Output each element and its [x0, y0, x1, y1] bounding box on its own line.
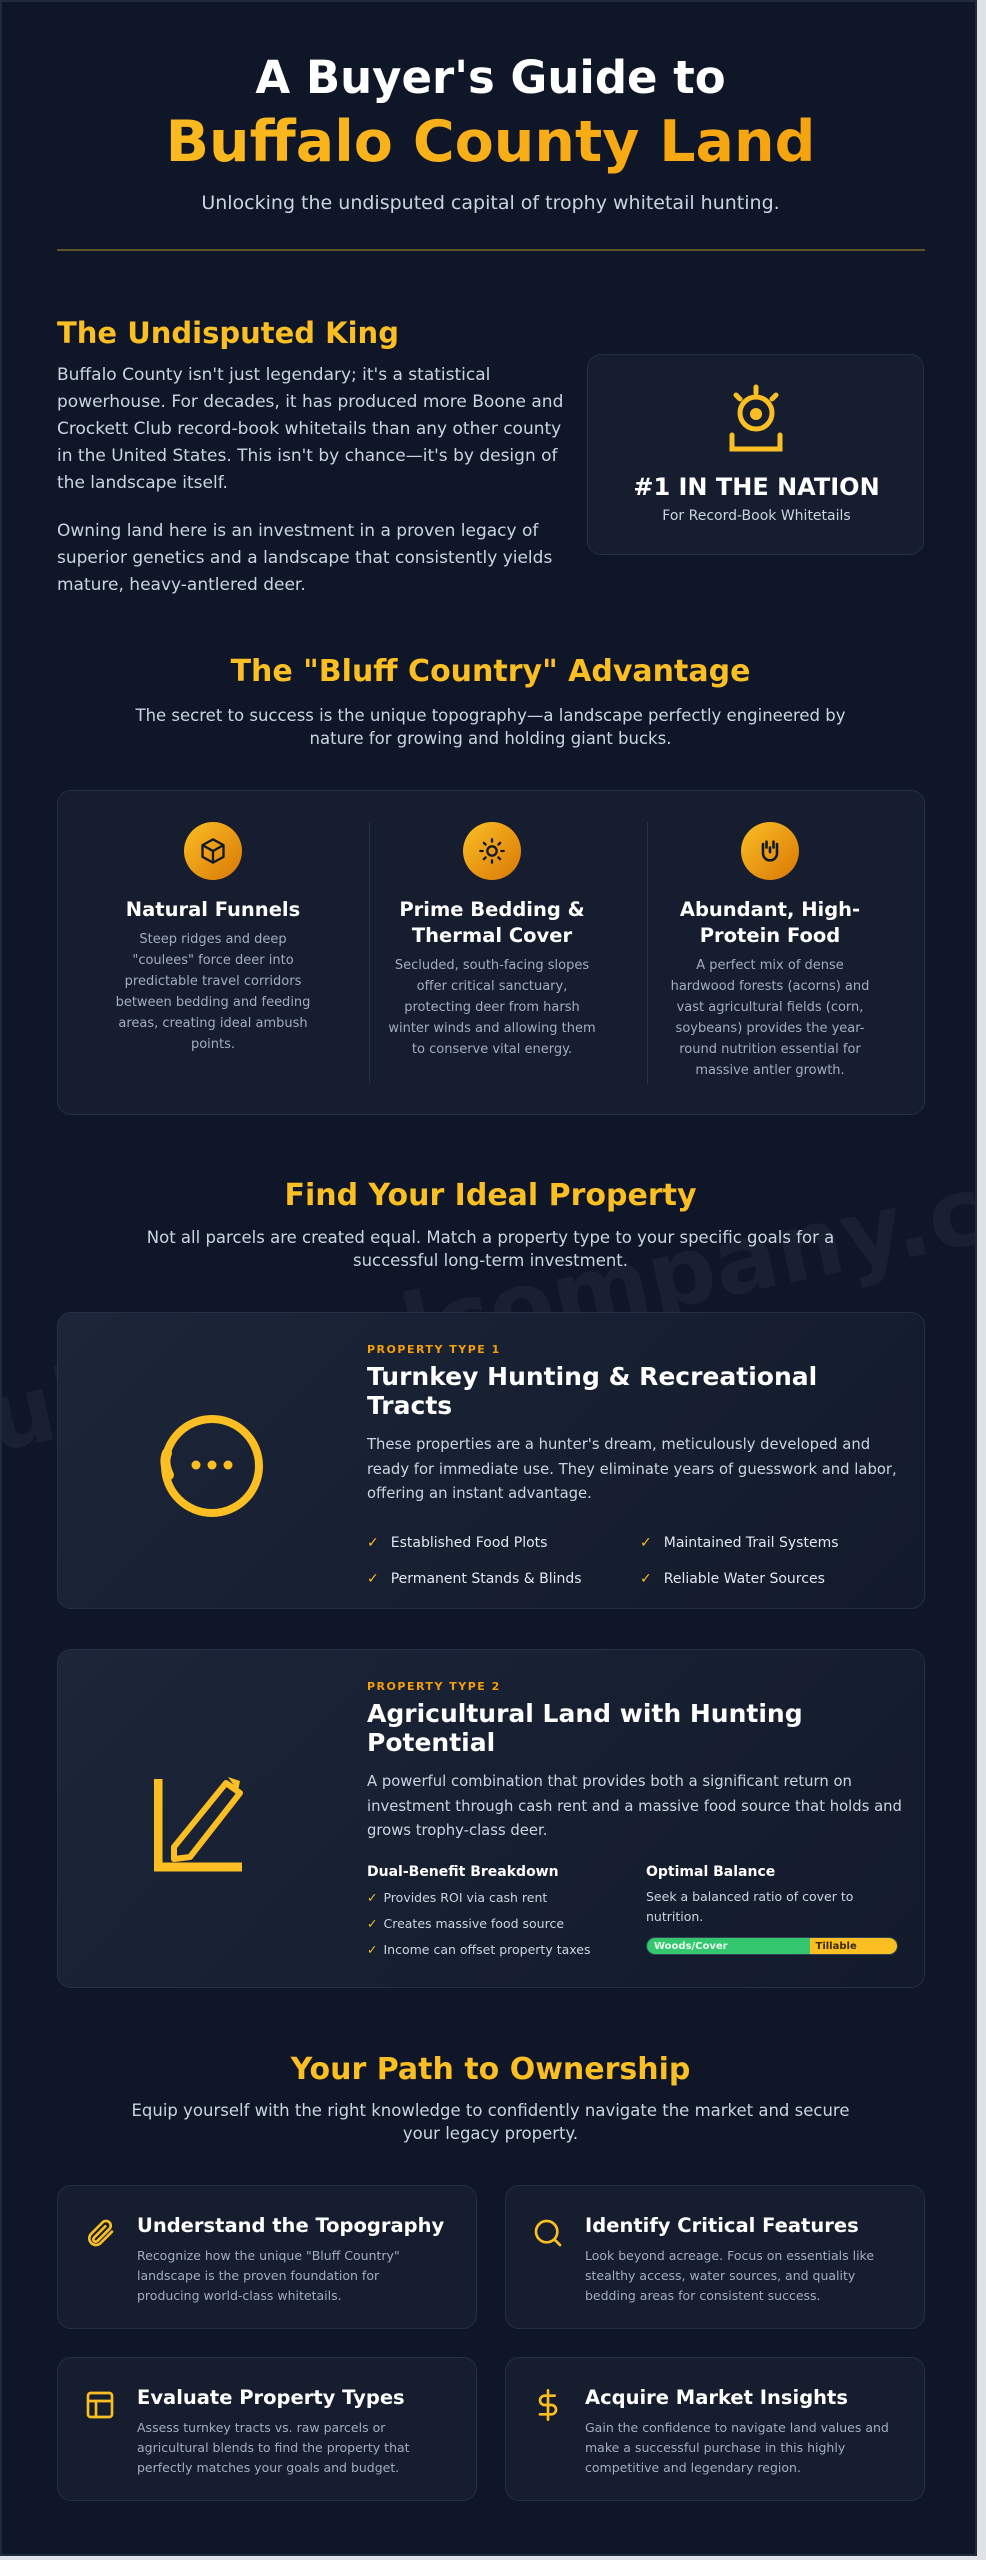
icon: layout: [86, 2392, 114, 2418]
card: evaluate property types: [57, 2357, 477, 2501]
heading: bluff country: The "Bluff Country" Advantage: [231, 654, 750, 689]
column: food: [671, 822, 869, 1078]
panel: property type 1: Turnkey Hunting & Recreational Tracts: [367, 1362, 817, 1420]
panel: property type 2: PROPERTY TYPE 2: [367, 1680, 501, 1693]
heading: the undisputed king: The Undisputed King: [57, 316, 399, 350]
card: identify features: Look beyond acreage. Focus on essentials like stealthy access, water sources, and quality bedding areas for consistent success.: [585, 2248, 874, 2303]
panel: property type 2: Agricultural Land with Hunting Potential: [367, 1699, 803, 1757]
panel: #1 in the nation: [587, 354, 924, 555]
text block: king paragraphs: Buffalo County isn't just legendary; it's a statistical powerhouse. For decades, it has produced more Boone and Crockett Club record-book whitetails than any other county in the United States. This isn't by chance—it's by design of the landscape itself.: [57, 365, 563, 493]
card: understand topography: [57, 2185, 477, 2329]
card: market insights: Gain the confidence to navigate land values and make a successful purchase in this highly competitive and legendary region.: [585, 2420, 889, 2475]
column: natural funnels: Natural Funnels: [126, 898, 300, 921]
column: prime bedding: [388, 822, 596, 1057]
panel: three advantages: [57, 790, 925, 1115]
icon: paperclip: [88, 2220, 114, 2246]
chart: optimal balance bar: Optimal Balance: [646, 1864, 775, 1880]
text block: property subtitle: Not all parcels are created equal. Match a property type to your specific goals for a successful long-term investment.: [147, 1228, 834, 1270]
column: prime bedding: Thermal Cover: [412, 924, 572, 947]
text block: bluff subtitle: The secret to success is the unique topography—a landscape perfectly engineered by nature for growing and holding giant bucks.: [136, 706, 846, 748]
column: natural funnels: Steep ridges and deep "coulees" force deer into predictable travel corridors between bedding and feeding areas, creating ideal ambush points.: [116, 932, 310, 1052]
card: evaluate property types: Assess turnkey tracts vs. raw parcels or agricultural blends to find the property that perfectly matches your goals and budget.: [137, 2420, 410, 2475]
list: dual-benefit: ✓ Creates massive food source: [367, 1916, 564, 1931]
panel: property type 1: ✓ Maintained Trail Systems: [640, 1535, 838, 1551]
chart: optimal balance bar: [646, 1864, 898, 1955]
column: natural funnels: [116, 822, 310, 1052]
text block: ownership subtitle: Equip yourself with the right knowledge to confidently navigate the market and secure your legacy property.: [131, 2101, 850, 2143]
panel: #1 in the nation: For Record-Book Whitetails: [662, 508, 851, 524]
icon: chat circle: [160, 1415, 263, 1517]
panel: property type 2: A powerful combination that provides both a significant return on investment through cash rent and a massive food source that holds and grows trophy-class deer.: [367, 1773, 902, 1839]
list: dual-benefit: Dual-Benefit Breakdown: [367, 1864, 559, 1880]
title: A Buyer's Guide to: [255, 51, 726, 104]
chart: optimal balance bar: Woods/Cover: [654, 1941, 728, 1952]
icon: sun: [463, 822, 521, 880]
title: Buffalo County Land: [166, 109, 815, 175]
panel: property type 2: [57, 1649, 925, 1988]
panel: property type 1: [57, 1312, 925, 1609]
card: market insights: [505, 2357, 925, 2501]
heading: path to ownership: Your Path to Ownership: [291, 2052, 690, 2087]
chart: optimal balance bar: Seek a balanced ratio of cover to nutrition.: [646, 1889, 853, 1924]
card: market insights: Acquire Market Insights: [585, 2386, 848, 2409]
icon: pencil square: [154, 1777, 243, 1872]
column: prime bedding: Prime Bedding &: [399, 898, 585, 921]
text block: king paragraphs: Owning land here is an investment in a proven legacy of superior genetics and a landscape that consistently yields mature, heavy-antlered deer.: [57, 521, 552, 595]
column: food: Protein Food: [700, 924, 840, 947]
icon: food: [741, 822, 799, 880]
column: food: Abundant, High-: [680, 898, 860, 921]
checklist: [367, 1535, 838, 1587]
list: dual-benefit: [367, 1864, 590, 1957]
column: food: A perfect mix of dense hardwood forests (acorns) and vast agricultural fields (corn, soybeans) provides the year-round nutrition essential for massive antler growth.: [671, 958, 869, 1078]
icon: dollar: [538, 2389, 558, 2421]
card: identify features: [505, 2185, 925, 2329]
icon: award: [730, 384, 782, 452]
panel: property type 1: ✓ Established Food Plots: [367, 1535, 547, 1551]
card: identify features: Identify Critical Features: [585, 2214, 859, 2237]
panel: #1 in the nation: #1 IN THE NATION: [633, 473, 880, 501]
title: [166, 51, 815, 175]
panel: property type 1: PROPERTY TYPE 1: [367, 1343, 501, 1356]
icon: cube: [184, 822, 242, 880]
icon: search: [534, 2220, 562, 2246]
card: evaluate property types: Evaluate Property Types: [137, 2386, 405, 2409]
panel: property type 1: ✓ Reliable Water Sources: [640, 1571, 825, 1587]
panel: property type 1: ✓ Permanent Stands & Blinds: [367, 1571, 582, 1587]
card: understand topography: Recognize how the unique "Bluff Country" landscape is the proven foundation for producing world-class whitetails.: [137, 2248, 400, 2303]
chart: optimal balance bar: Tillable: [816, 1941, 857, 1952]
column: prime bedding: Secluded, south-facing slopes offer critical sanctuary, protecting deer from harsh winter winds and allowing them to conserve vital energy.: [388, 958, 596, 1057]
list: dual-benefit: ✓ Income can offset property taxes: [367, 1942, 590, 1957]
heading: find your ideal property: Find Your Ideal Property: [284, 1178, 697, 1213]
panel: property type 1: These properties are a hunter's dream, meticulously developed and ready for immediate use. They eliminate years of guesswork and labor, offering an instant advantage.: [367, 1436, 897, 1502]
card: understand topography: Understand the Topography: [137, 2214, 444, 2237]
list: dual-benefit: ✓ Provides ROI via cash rent: [367, 1890, 547, 1905]
subtitle: Unlocking the undisputed capital of trophy whitetail hunting.: [201, 192, 780, 214]
text block: king paragraphs: [57, 365, 563, 595]
